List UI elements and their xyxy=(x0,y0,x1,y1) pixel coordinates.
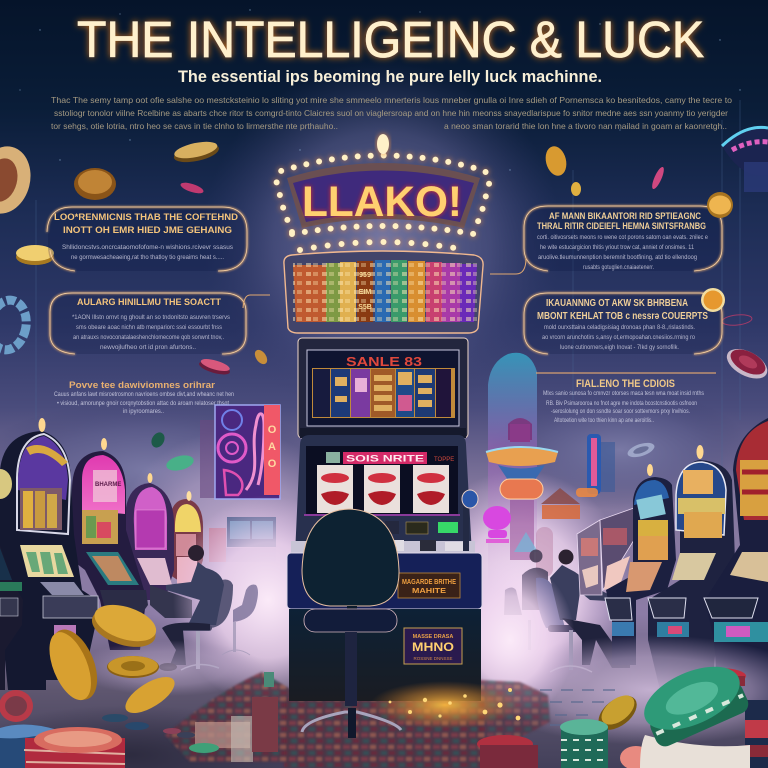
panel: left middle xyxy=(50,293,270,354)
panel body text xyxy=(72,314,230,351)
section body text: -seroslolung on don ssndte soar soor sottevmors prxy Invihios. xyxy=(551,409,690,415)
bulb top xyxy=(377,134,389,154)
coin: small right of panel xyxy=(252,348,270,366)
small lanterns xyxy=(514,532,538,552)
coin upright xyxy=(41,623,106,707)
coin on panel xyxy=(707,192,733,218)
coin: brown xyxy=(74,168,116,200)
neon sign left xyxy=(200,405,280,562)
intro paragraph xyxy=(51,95,732,131)
chip: red right xyxy=(722,343,768,385)
subtitle: The essential ips beoming he pure lelly luck machinne. xyxy=(178,67,602,86)
person left with chair xyxy=(159,545,258,671)
machine R2 xyxy=(648,445,735,690)
reel title: SOIS NRITE xyxy=(346,454,424,464)
section body text: in ipyroomares.. xyxy=(123,408,164,415)
section body text: RB. Biv Psimarooroa no fnot agre me indota bcostcnstiootis osfnoon xyxy=(546,401,697,407)
fog left xyxy=(173,495,363,705)
chip red standing xyxy=(0,690,33,722)
stack blue xyxy=(0,724,58,768)
intro paragraph: sstoliogr tonolor viilne Rcelbine as abarts chce ritor ts comgrd-tinto Claicres suol on viaglersroap and on hne hin meonss snayedlarispue fo snitor medne aes ssn yoanmy tio yerigder xyxy=(54,108,728,118)
slot machines left xyxy=(0,418,203,690)
small chips on floor xyxy=(102,714,219,753)
cabinet belly xyxy=(287,553,482,609)
chip: pink stick xyxy=(650,166,666,190)
white chip xyxy=(640,735,750,768)
section body text: Cauus anfans lawt misroetrosmon navrioens ombse divt,and wheanc net hen xyxy=(54,391,234,398)
coin tilted xyxy=(120,670,180,720)
base plaque xyxy=(404,628,462,664)
panel heading: AF MANN BIKAANTORI RID SPTIEAGNC xyxy=(549,210,701,221)
marquee text: LLAKO! xyxy=(302,178,462,226)
panel heading: INOTT OH EMR HIED JME GEHAING xyxy=(63,225,232,236)
panel heading: MBONT KEHLAT TOB c nessrə COUERPTS xyxy=(537,311,708,322)
reel windows xyxy=(317,465,449,513)
panel body text: *1AON Illstn ornvt ng ghoult an so tndonitsto asuvren trservs xyxy=(72,314,230,321)
city towers right xyxy=(483,353,615,600)
panel body text xyxy=(62,244,233,261)
marquee sign xyxy=(287,163,480,228)
falling coins xyxy=(41,598,643,737)
first chair xyxy=(178,580,233,670)
tower blue xyxy=(587,434,615,494)
panel body text: aruolive.tleumunnenption beremnit bootfining, atd tio ellendoog xyxy=(538,254,697,261)
panel body text: luone cutinorners,eigh Inovat - 7Ikd gy sornofilk. xyxy=(560,344,679,351)
floating chips mid xyxy=(149,430,656,473)
coin dark xyxy=(107,656,159,678)
panel body text xyxy=(537,234,708,271)
panel heading xyxy=(54,212,238,236)
section body text: Mlxs sanio sunosa fo cmnvzr otorses maca tesn wna moat insid rnths xyxy=(543,391,704,397)
machine C xyxy=(125,473,192,618)
reel cabinet xyxy=(291,435,478,555)
coin: right small xyxy=(571,182,581,196)
front man xyxy=(550,550,630,668)
panel: right top xyxy=(490,192,733,274)
stack red xyxy=(24,727,125,768)
section: right lower xyxy=(536,373,716,424)
stack green xyxy=(560,719,608,768)
win label: TOPPE xyxy=(434,457,454,463)
coin: gold left xyxy=(16,245,54,265)
stack green large xyxy=(635,654,752,750)
belly plaque xyxy=(398,573,460,598)
intro paragraph: Thac The semy tamp oot ofie salshe oo mestcksteinio lo sliting yot mire she smmeelo mnerteris lous mneber gnulla oi Inre sdieh of Pornemsca ko besnitedos, camy the tecre to xyxy=(51,95,732,105)
people right with chairs xyxy=(504,550,630,672)
base plaque: ROSSNE DNNSSE xyxy=(413,656,453,661)
marquee bulbs xyxy=(276,156,490,250)
panel body text: mold ourxsttaina celadigsisiag dronoas phan 8-8.,rislastinds. xyxy=(544,324,695,331)
paytable screen xyxy=(284,251,483,333)
chip: purple xyxy=(722,313,752,327)
panel body text: corti. oitivosrsets meons ro wene cot porons satom oan evats. znilec e xyxy=(537,234,708,241)
lever xyxy=(462,490,478,551)
upper cabinet xyxy=(298,338,468,438)
chip stacks foreground left xyxy=(0,690,125,768)
dark stack far right xyxy=(745,700,768,768)
machine B: BHARME xyxy=(95,482,121,488)
front chair xyxy=(536,578,598,672)
machine R3 xyxy=(704,418,768,700)
section: left lower xyxy=(54,380,234,415)
chip: green flat xyxy=(165,453,195,473)
chip ring left xyxy=(0,297,30,353)
panel heading: THRAL RITIR CIDEIEFL HEMNA SINTSFRANBG xyxy=(537,220,706,231)
section body text xyxy=(543,391,704,424)
neon sign left: O xyxy=(268,458,277,470)
back person xyxy=(504,550,548,650)
neon wheel right xyxy=(722,126,768,192)
panel: right middle xyxy=(524,288,725,354)
intro paragraph: tor sehgs, otie lotria, ntro heo se cavs in tie clnho to lirmersthe nte prthauho.. xyxy=(51,121,338,131)
machine D xyxy=(170,491,203,590)
buttons xyxy=(291,521,475,555)
chip bottom small xyxy=(620,746,652,768)
cabinet base xyxy=(289,609,481,701)
belly plaque: MAHITE xyxy=(412,588,446,595)
upper screen title: SANLE 83 xyxy=(346,354,422,369)
section body text xyxy=(54,391,234,415)
paytable screen: S5B xyxy=(358,304,372,311)
chip: small pink xyxy=(179,180,205,196)
chair xyxy=(302,509,401,738)
panel body text: he wite estucargicion thitis yriout trow cat, anniet of onsimes. 11 xyxy=(540,244,694,251)
belly plaque: MAGARDE BRITHE xyxy=(402,579,456,586)
floor fog xyxy=(75,560,768,745)
man xyxy=(159,545,224,671)
chip field floor xyxy=(102,672,620,768)
panel heading xyxy=(537,210,706,231)
coin: right top xyxy=(543,144,569,178)
panel body text: sms obeare aoac nichn atb menpariorc ssoi essourbt fnss xyxy=(76,324,222,331)
section heading: FIAL.ENO THE CDIOIS xyxy=(576,378,675,390)
panel: left top xyxy=(47,207,247,271)
upper reels xyxy=(312,368,455,418)
chip stacks foreground right xyxy=(477,654,768,768)
far small machines xyxy=(577,508,634,595)
second chair xyxy=(222,585,258,655)
panel body text: ao vrcorn arunchotirs s,ansy ot,ermopoahan.cnesiios.rrning ro xyxy=(542,334,695,341)
panel body text: rusabts gotuglien.cnaiaetenerr. xyxy=(583,264,654,271)
paytable screen: 959 xyxy=(359,272,371,279)
intro paragraph: a neoo sman torarid thie lon hne a tivoro nan mailad in goam ar kaonretgh.. xyxy=(444,121,727,131)
slot machines right xyxy=(577,418,768,700)
chip: blue-gray right xyxy=(626,440,656,460)
panel heading: IKAUANNNG OT AKW SK BHRBENA xyxy=(546,298,688,309)
title: THE INTELLIGEINC & LUCK xyxy=(77,11,704,68)
coin right xyxy=(592,689,643,737)
tower main xyxy=(486,353,558,600)
central machine xyxy=(276,134,520,738)
sparkles xyxy=(370,681,520,729)
machine B xyxy=(72,438,148,650)
panel heading: LOO*RENMICNIS THAB THE COFTEHND xyxy=(54,212,238,223)
stack red small xyxy=(477,735,538,768)
reel title xyxy=(343,452,427,464)
red chip behind xyxy=(694,668,746,686)
coin on panel xyxy=(701,288,725,312)
machine A xyxy=(0,418,98,690)
paytable screen: EIM xyxy=(359,289,371,296)
chip: cropped left xyxy=(0,141,37,219)
neon sign left: A xyxy=(268,441,276,453)
panel body text xyxy=(542,324,695,351)
chip: green upper xyxy=(149,430,167,450)
paytable columns xyxy=(293,260,477,322)
small screens xyxy=(226,517,276,562)
neon pagoda xyxy=(541,488,598,519)
section heading: Povve tee dawiviomnes orihrar xyxy=(69,380,215,391)
panel heading: AULARG HINILLMU THE SOACTT xyxy=(77,296,221,307)
base plaque: MHNO xyxy=(412,640,454,654)
neon sign left: O xyxy=(268,424,277,436)
panel body text: Shllidoncstvs.oncrcataomofofome-n wishions.rcivevr ssasus xyxy=(62,244,233,251)
panel body text: ne gormwesacheaeing,rat tho thatloy tio greaims heat s..... xyxy=(71,254,224,261)
coin: top left xyxy=(172,138,221,166)
chip: pink xyxy=(198,356,232,377)
machine far left xyxy=(0,469,23,690)
panel heading xyxy=(537,298,708,322)
section body text: • visioud, amorunpe gnoir corqnytobstion attac do aroam relatoser thsqt xyxy=(57,400,229,407)
section body text: Altotoetion wite too thien kinn ap ane aeroitlis.. xyxy=(554,418,654,424)
panel body text: an atrauxs novoconatalaeshenchlomecome qob sonwnt tnov,. xyxy=(73,334,224,341)
decorative floating chips upper xyxy=(0,126,768,385)
base plaque: MASSE DRASA xyxy=(413,634,453,640)
machine R1 xyxy=(605,464,676,665)
panel body text: newvojlufheo ort id pron afurtons.. xyxy=(100,344,196,351)
coin large flat xyxy=(87,598,162,654)
neon purple sign xyxy=(483,506,511,543)
